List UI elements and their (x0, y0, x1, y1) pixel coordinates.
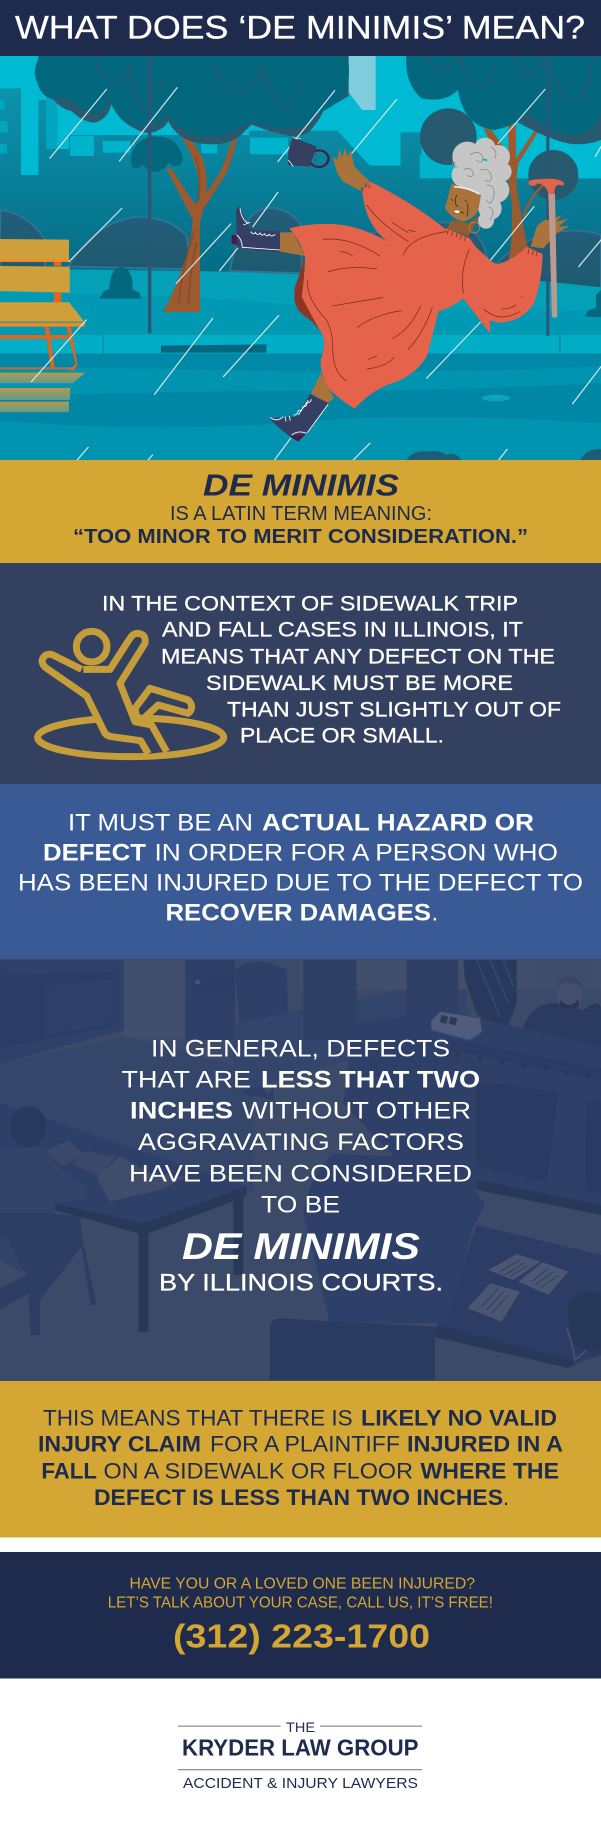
claim text: ON A SIDEWALK OR FLOOR (104, 1459, 413, 1484)
call to action text: LET’S TALK ABOUT YOUR CASE, CALL US, IT’S FREE! (108, 1594, 493, 1611)
claim text: INJURY CLAIM (38, 1432, 201, 1457)
hand (531, 215, 569, 248)
left tree canopy shadow (38, 56, 349, 144)
courtroom text: INCHES (130, 1098, 233, 1125)
sleeve cuff and folds (447, 230, 537, 317)
panel: courtroom (0, 959, 601, 1381)
call to action text (108, 1575, 493, 1611)
hair curls (452, 147, 496, 220)
woman's left sleeve and hand (333, 148, 447, 254)
hazard text: ACTUAL HAZARD OR (262, 810, 534, 837)
icon: person falling into hole (38, 631, 224, 757)
park bench (0, 239, 85, 412)
panel: actual hazard (0, 784, 601, 960)
claim text: . (503, 1485, 509, 1510)
courtroom scene: left side (0, 960, 297, 1335)
context text: SIDEWALK MUST BE MORE (206, 671, 513, 695)
definition quote: “TOO MINOR TO MERIT CONSIDERATION.” (73, 526, 528, 548)
rain streaks (31, 88, 601, 461)
courtroom text: HAVE BEEN CONSIDERED (129, 1161, 472, 1188)
title: WHAT DOES ‘DE MINIMIS’ MEAN? (15, 10, 585, 46)
panel: likely no valid claim (0, 1381, 601, 1538)
courtroom text: THAT ARE (122, 1067, 251, 1094)
face (445, 183, 481, 222)
panel: call to action (0, 1552, 601, 1678)
logo: The Kryder Law Group (178, 1719, 422, 1792)
hair (452, 138, 512, 229)
claim text: WHERE THE (420, 1459, 559, 1484)
left tree canopy (35, 56, 349, 136)
panel: definition (0, 460, 601, 564)
small mushroom tree top (131, 136, 183, 172)
sky, buildings, ground and road (0, 56, 601, 461)
definition line: IS A LATIN TERM MEANING: (170, 503, 432, 525)
hazard text: HAS BEEN INJURED DUE TO THE DEFECT TO (18, 870, 583, 897)
dress creases (307, 205, 447, 381)
context text: IN THE CONTEXT OF SIDEWALK TRIP (102, 592, 518, 616)
claim text: LIKELY NO VALID (361, 1406, 557, 1431)
logo: The Kryder Law Group: ACCIDENT & INJURY LAWYERS (183, 1775, 418, 1792)
claim text: FALL (41, 1459, 97, 1484)
skirt and bodice (289, 224, 490, 408)
hazard text: IN ORDER FOR A PERSON WHO (154, 840, 558, 867)
woman's lower body: legs, boots and skirt (232, 207, 490, 442)
hazard text: . (432, 900, 438, 927)
courtroom text (122, 1036, 480, 1297)
neck (447, 215, 480, 237)
right canopy (406, 56, 601, 317)
left tree trunk (163, 111, 239, 312)
right sleeve (413, 228, 543, 323)
earring (469, 222, 480, 233)
legs (280, 232, 305, 256)
courtroom scene: right side (233, 960, 601, 1380)
hazard text: IT MUST BE AN (68, 810, 253, 837)
phone number: (312) 223-1700 (173, 1618, 430, 1655)
context text: AND FALL CASES IN ILLINOIS, IT (162, 618, 523, 642)
skirt shadow (294, 257, 327, 360)
flying teacup (288, 137, 328, 167)
courtroom text: DE MINIMIS (182, 1226, 420, 1267)
panel: sidewalk context (0, 563, 601, 784)
claim text: INJURED IN A (407, 1432, 563, 1457)
right tree, pole and canopy (420, 56, 578, 336)
context text: PLACE OR SMALL. (240, 724, 444, 748)
call to action text: HAVE YOU OR A LOVED ONE BEEN INJURED? (130, 1575, 475, 1592)
context text: MEANS THAT ANY DEFECT ON THE (161, 644, 555, 668)
courtroom text: LESS THAT TWO (261, 1067, 480, 1094)
hazard text: RECOVER DAMAGES (166, 900, 431, 927)
woman's right side: cane, hand, sleeve, head (413, 138, 569, 323)
logo: The Kryder Law Group: KRYDER LAW GROUP (182, 1735, 418, 1761)
courtroom text: IN GENERAL, DEFECTS (151, 1036, 450, 1063)
claim text: FOR A PLAINTIFF (210, 1432, 400, 1457)
hero illustration: elderly woman slipping in the rain (0, 56, 601, 461)
hazard text (18, 810, 583, 927)
left pole (148, 56, 151, 333)
context text: THAN JUST SLIGHTLY OUT OF (227, 698, 561, 722)
claim text: THIS MEANS THAT THERE IS (43, 1406, 353, 1431)
courtroom text: BY ILLINOIS COURTS. (159, 1270, 443, 1297)
courtroom text: TO BE (261, 1192, 340, 1219)
left bushes, pole and tree (0, 56, 349, 333)
small bush (99, 267, 141, 299)
logo: The Kryder Law Group: THE (286, 1719, 315, 1735)
boots (232, 207, 329, 442)
hazard text: DEFECT (43, 840, 146, 867)
title banner (0, 0, 601, 56)
claim text (38, 1406, 563, 1510)
context text (102, 592, 561, 748)
courtroom text: AGGRAVATING FACTORS (138, 1129, 464, 1156)
claim text: DEFECT IS LESS THAN TWO INCHES (94, 1485, 503, 1510)
cane (548, 193, 557, 318)
courtroom text: WITHOUT OTHER (242, 1098, 471, 1125)
definition heading: DE MINIMIS (203, 468, 399, 502)
